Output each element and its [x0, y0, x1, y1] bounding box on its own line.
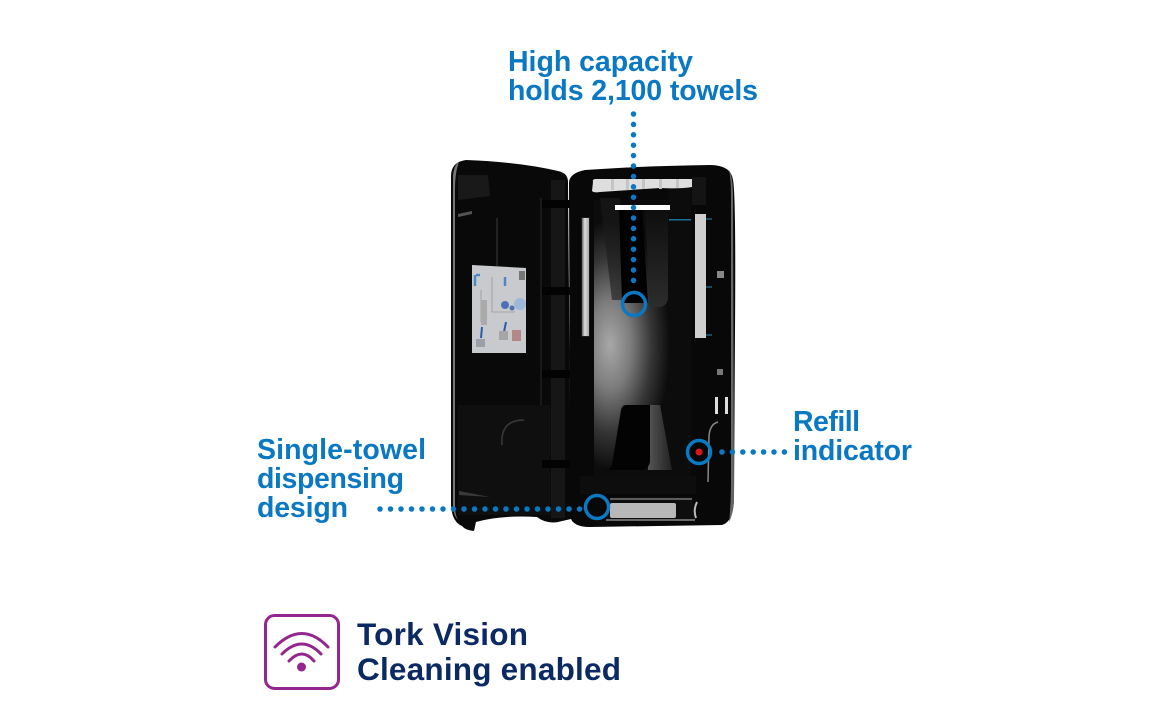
dotted leader: single-towel dispensing [380, 506, 580, 512]
callout: single-towel dispensing [257, 434, 608, 524]
heading: single-towel dispensing: Single-towel [257, 434, 426, 466]
heading: single-towel dispensing: design [257, 492, 348, 524]
refill LED [696, 448, 702, 456]
dispenser body [569, 165, 735, 527]
dotted leader: high capacity [631, 114, 636, 282]
inner back panel [594, 200, 670, 476]
heading: refill indicator: Refill [793, 406, 860, 438]
ring marker: refill indicator [688, 440, 710, 464]
white slot [615, 205, 670, 210]
side windows [581, 217, 590, 337]
icon: Tork Vision wifi [266, 616, 338, 688]
heading: Tork Vision Cleaning enabled: Cleaning enabled [357, 651, 621, 687]
callout: high capacity [508, 46, 758, 316]
heading: refill indicator: indicator [793, 435, 912, 467]
ring marker: single-towel dispensing [586, 496, 608, 518]
ring marker: high capacity [622, 292, 646, 316]
left door [451, 160, 574, 531]
lower chute [648, 405, 672, 470]
heading: single-towel dispensing: dispensing [257, 463, 404, 495]
instruction label on door [472, 265, 526, 353]
upper wedge [645, 210, 668, 307]
callout: refill indicator [688, 406, 912, 467]
heading: high capacity: High capacity [508, 46, 693, 78]
heading: Tork Vision Cleaning enabled: Tork Vision [357, 616, 528, 652]
top roller [592, 179, 692, 192]
dispenser illustration [451, 160, 735, 531]
dotted leader: refill indicator [722, 449, 786, 455]
bottom dispensing area [606, 497, 696, 520]
heading: high capacity: holds 2,100 towels [508, 75, 758, 107]
